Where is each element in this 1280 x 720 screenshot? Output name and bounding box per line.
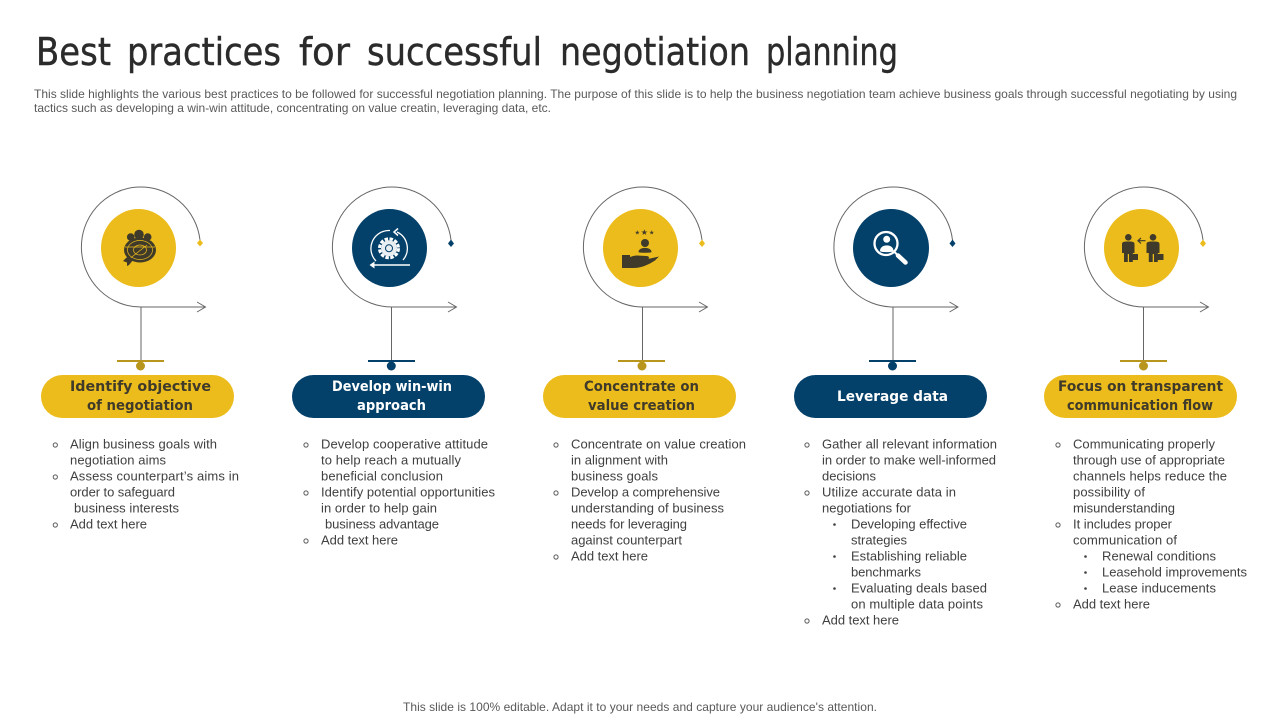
spiral arrow 4: [834, 187, 958, 312]
bullet list 5: through use of appropriate: [1073, 452, 1225, 468]
bullet list 3: Add text here: [571, 548, 648, 564]
bullet list 3: [554, 436, 746, 564]
icon: hand with person and stars: ★: [641, 228, 648, 237]
bullet list 1: order to safeguard: [70, 484, 175, 500]
heading pill 4: Leverage data: [837, 389, 948, 405]
icon: hand with person and stars: [622, 228, 659, 268]
bullet list 4: in order to make well-informed: [822, 452, 996, 468]
title: [36, 30, 898, 74]
bullet list 5: communication of: [1073, 532, 1177, 548]
bullet list 4: Establishing reliable: [851, 548, 967, 564]
bullet list 4: negotiations for: [822, 500, 912, 516]
panel: transparent communication: [1044, 187, 1248, 612]
icon: hand with person and stars: ★: [649, 230, 654, 236]
bullet list 5: misunderstanding: [1073, 500, 1175, 516]
title: planning: [766, 30, 898, 74]
bullet list 5: channels helps reduce the: [1073, 468, 1227, 484]
heading pill 1: of negotiation: [87, 398, 193, 414]
bullet list 5: possibility of: [1073, 484, 1145, 500]
bullet list 4: strategies: [851, 532, 908, 548]
icon circle 1: [101, 209, 176, 287]
connector 1: [117, 307, 164, 370]
connector 5: [1120, 307, 1167, 370]
icon: two people with arrow: [1122, 234, 1164, 262]
bullet list 2: beneficial conclusion: [321, 468, 443, 484]
bullet list 4: Utilize accurate data in: [822, 484, 956, 500]
bullet list 3: understanding of business: [571, 500, 724, 516]
title: practices: [127, 30, 281, 74]
bullet list 3: needs for leveraging: [571, 516, 687, 532]
icon: hand with person and stars: ★: [635, 230, 640, 236]
icon circle 2: [352, 209, 427, 287]
icon: team target: [123, 230, 156, 266]
bullet list 2: [304, 436, 496, 548]
bullet list 4: Evaluating deals based: [851, 580, 987, 596]
bullet list 5: Renewal conditions: [1102, 548, 1216, 564]
title: Best: [36, 30, 111, 74]
intro text: This slide highlights the various best practices to be followed for successful negotiation planning. The purpose of this slide is to help the business negotiation team achieve business goals through successful negotiating by using: [34, 87, 1237, 101]
heading pill 2: approach: [357, 398, 426, 414]
heading pill 2: Develop win-win: [332, 379, 452, 395]
bullet list 5: Add text here: [1073, 596, 1150, 612]
bullet list 2: business advantage: [325, 516, 439, 532]
bullet list 1: [53, 436, 239, 532]
title: negotiation: [560, 30, 750, 74]
bullet list 2: in order to help gain: [321, 500, 437, 516]
icon circle 5: [1104, 209, 1179, 287]
spiral arrow 2: [332, 187, 456, 312]
bullet list 2: Develop cooperative attitude: [321, 436, 488, 452]
intro text: [34, 87, 1237, 115]
spiral arrow 3: [583, 187, 708, 312]
spiral arrow 5: [1084, 187, 1208, 312]
bullet list 3: Develop a comprehensive: [571, 484, 720, 500]
bullet list 4: [805, 436, 997, 628]
bullet list 1: negotiation aims: [70, 452, 166, 468]
panel: leverage data: [794, 187, 997, 628]
bullet list 2: Identify potential opportunities: [321, 484, 496, 500]
spiral arrow 1: [81, 187, 206, 312]
heading pill 3: Concentrate on: [584, 379, 699, 395]
footer note: This slide is 100% editable. Adapt it to your needs and capture your audience's attention.: [403, 700, 877, 714]
heading pill 5: [1044, 375, 1237, 418]
bullet list 4: decisions: [822, 468, 876, 484]
bullet list 5: Communicating properly: [1073, 436, 1216, 452]
intro text: tactics such as developing a win-win attitude, concentrating on value creatin, leveraging data, etc.: [34, 101, 551, 115]
icon circle 4: [853, 209, 929, 287]
heading pill 1: [41, 375, 234, 418]
bullet list 4: on multiple data points: [851, 596, 984, 612]
panel: identify objective: [41, 187, 239, 532]
bullet list 4: benchmarks: [851, 564, 922, 580]
bullet list 3: against counterpart: [571, 532, 682, 548]
heading pill 3: [543, 375, 736, 418]
heading pill 5: communication flow: [1067, 398, 1213, 414]
bullet list 5: It includes proper: [1073, 516, 1173, 532]
bullet list 1: business interests: [74, 500, 180, 516]
bullet list 1: Align business goals with: [70, 436, 217, 452]
icon: magnifier with person: [874, 232, 906, 262]
connector 4: [869, 307, 916, 370]
connector 2: [368, 307, 415, 370]
title: successful: [367, 30, 542, 74]
bullet list 5: [1056, 436, 1248, 612]
bullet list 4: Developing effective: [851, 516, 967, 532]
heading pill 3: value creation: [588, 398, 695, 414]
bullet list 2: to help reach a mutually: [321, 452, 462, 468]
bullet list 4: Gather all relevant information: [822, 436, 997, 452]
bullet list 1: Add text here: [70, 516, 147, 532]
bullet list 1: Assess counterpart’s aims in: [70, 468, 239, 484]
icon: gear cycle: [370, 228, 410, 268]
connector 3: [618, 307, 665, 370]
panel: develop win-win: [292, 187, 496, 548]
heading pill 1: Identify objective: [70, 379, 211, 395]
icon circle 3: [603, 209, 678, 287]
panel: concentrate on value creation: [543, 187, 746, 564]
heading pill 4: [794, 375, 987, 418]
heading pill 2: [292, 375, 485, 418]
heading pill 5: Focus on transparent: [1058, 379, 1223, 395]
bullet list 4: Add text here: [822, 612, 899, 628]
bullet list 5: Leasehold improvements: [1102, 564, 1248, 580]
title: for: [299, 30, 350, 74]
bullet list 2: Add text here: [321, 532, 398, 548]
bullet list 3: in alignment with: [571, 452, 668, 468]
bullet list 3: business goals: [571, 468, 658, 484]
bullet list 5: Lease inducements: [1102, 580, 1216, 596]
bullet list 3: Concentrate on value creation: [571, 436, 746, 452]
